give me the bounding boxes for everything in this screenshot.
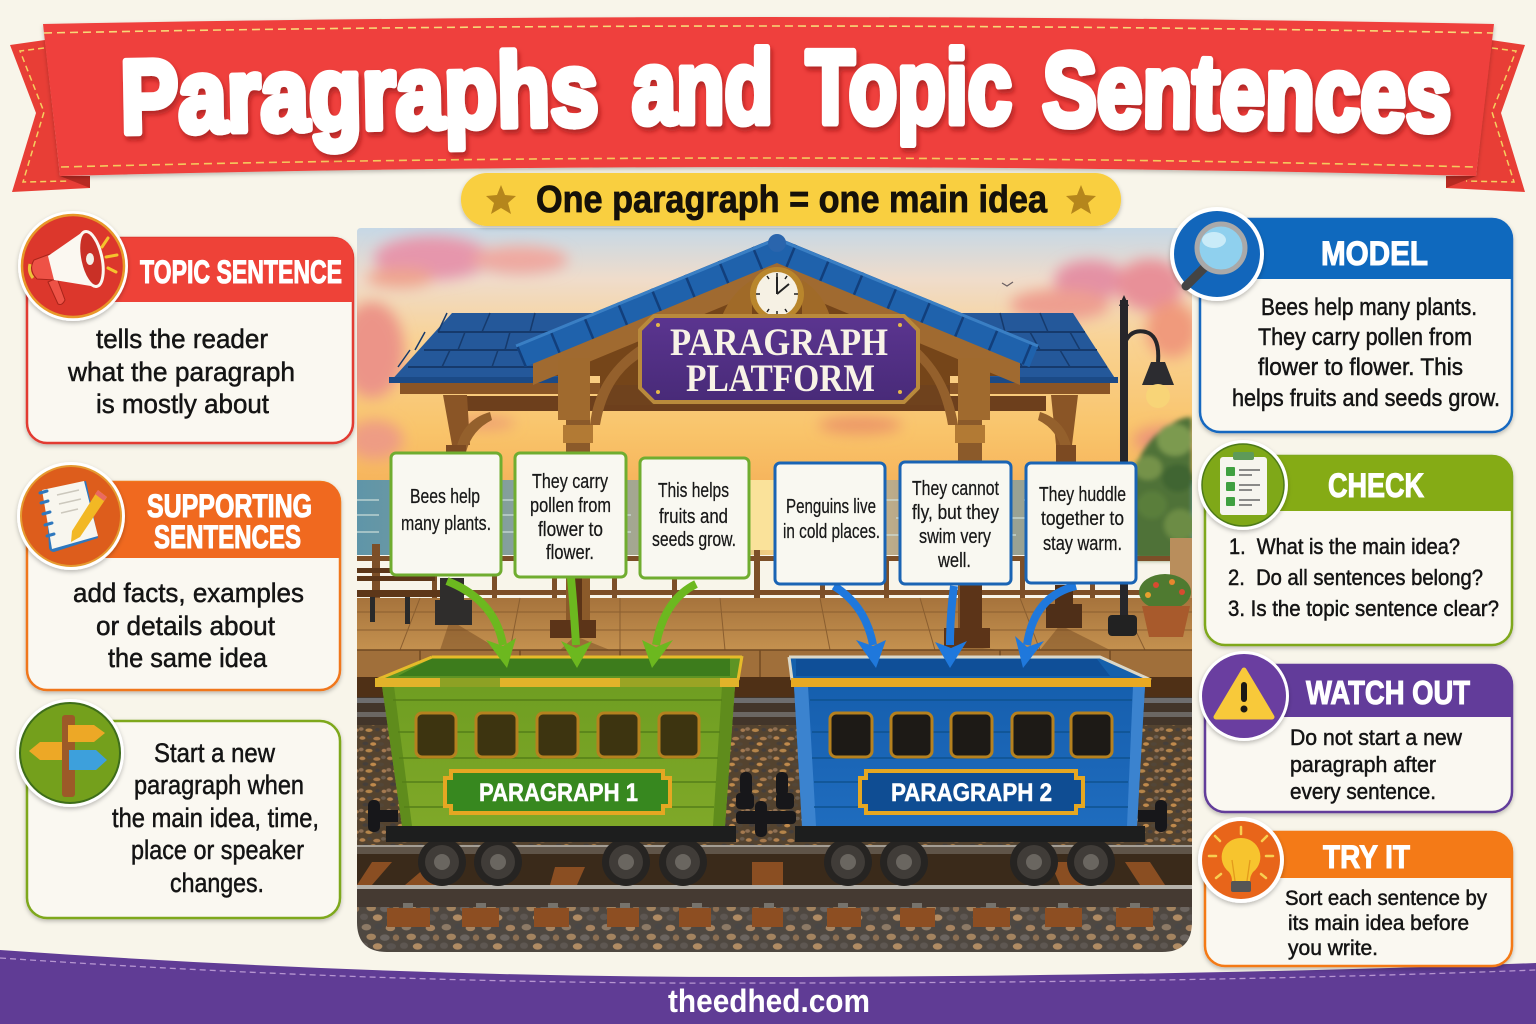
bench	[357, 568, 441, 624]
title banner	[10, 17, 1525, 192]
body text: tells the reader	[96, 324, 268, 354]
panel: check	[1198, 440, 1512, 645]
card: They carry pollen: flower.	[546, 542, 594, 564]
panel: topic sentence	[18, 211, 353, 443]
panel: supporting sentences	[17, 462, 340, 690]
side roofs	[394, 313, 592, 377]
couplers and buffers	[368, 772, 1167, 837]
ribbon body	[43, 17, 1494, 176]
railing	[357, 544, 1192, 599]
checklist text	[1228, 534, 1499, 621]
card: This helps fruits: This helps	[658, 480, 729, 502]
gable	[555, 304, 998, 385]
body text: flower to flower. This	[1258, 354, 1463, 381]
card: Bees help many plants: many plants.	[401, 513, 491, 535]
station deck	[357, 598, 1192, 697]
card: Penguins live: in cold places.	[783, 521, 880, 543]
arrows: sentences into paragraph 1	[447, 578, 696, 668]
footer website: theedhed.com	[668, 983, 870, 1019]
arrows: sentences into paragraph 2	[834, 586, 1076, 668]
heading: WATCH OUT	[1306, 674, 1470, 711]
body text: or details about	[96, 611, 275, 641]
posts	[446, 445, 466, 452]
sentence cards: paragraph 2	[775, 462, 1136, 584]
icon: warning triangle	[1199, 651, 1289, 741]
body text: every sentence.	[1290, 779, 1436, 804]
body text: you write.	[1288, 937, 1378, 960]
station sign: PARAGRAPH	[670, 321, 888, 364]
plaque	[445, 771, 670, 813]
card: This helps fruits	[640, 458, 749, 578]
station sign: PLATFORM	[686, 357, 875, 400]
gable tiles	[520, 250, 1034, 356]
body text	[67, 324, 295, 419]
body text	[1290, 725, 1462, 804]
heading: SENTENCES	[154, 519, 301, 555]
card: This helps fruits: seeds grow.	[652, 529, 736, 551]
icon: megaphone	[18, 211, 128, 321]
wheels	[418, 838, 707, 886]
body text: paragraph when	[134, 770, 304, 800]
panel: model	[1170, 207, 1512, 432]
body text: is mostly about	[96, 389, 269, 419]
plaque: PARAGRAPH 2	[891, 779, 1052, 807]
body text: changes.	[170, 868, 264, 898]
card: They cannot fly	[900, 462, 1011, 584]
trees	[1128, 417, 1196, 560]
checklist text: 3. Is the topic sentence clear?	[1228, 596, 1499, 621]
body text: its main idea before	[1288, 912, 1469, 935]
card: They huddle: stay warm.	[1043, 533, 1122, 555]
body text: add facts, examples	[73, 578, 304, 608]
heading: CHECK	[1328, 467, 1424, 505]
body text: Sort each sentence by	[1285, 887, 1487, 910]
title text: and	[632, 30, 773, 146]
body text: what the paragraph	[67, 357, 295, 387]
clock ornament	[722, 280, 830, 316]
card: Penguins live	[775, 463, 885, 584]
lamp post	[1108, 295, 1174, 636]
body text: the same idea	[108, 643, 268, 673]
panel header	[100, 482, 340, 558]
icon: signpost	[16, 699, 124, 807]
checklist text: 2. Do all sentences belong?	[1228, 565, 1483, 590]
panel header	[1250, 665, 1512, 717]
card: They carry pollen: They carry	[532, 471, 608, 493]
card: This helps fruits: fruits and	[659, 506, 728, 528]
front track	[357, 845, 1192, 927]
card: Bees help many plants: Bees help	[410, 486, 480, 508]
station sign	[640, 316, 918, 402]
icon: right star	[1066, 185, 1096, 214]
heading	[147, 488, 312, 555]
panel: try it	[1198, 817, 1512, 966]
icon: left star	[486, 185, 516, 214]
card: They cannot fly: fly, but they	[912, 502, 999, 524]
subtitle pill: One paragraph = one main idea	[536, 179, 1048, 221]
heading: SUPPORTING	[147, 488, 312, 524]
post bases	[550, 620, 596, 638]
train car: paragraph 2	[789, 656, 1151, 886]
flower pot	[1139, 574, 1191, 637]
icon: light bulb	[1198, 817, 1284, 903]
sun reflection	[750, 480, 774, 550]
rear track	[357, 697, 1192, 727]
subtitle pill	[461, 173, 1121, 226]
body text: paragraph after	[1290, 752, 1436, 777]
card: They cannot fly: well.	[937, 550, 971, 572]
clock	[750, 267, 804, 314]
train car: paragraph 1	[375, 656, 742, 886]
ballast	[357, 725, 1192, 850]
title text	[119, 30, 1452, 156]
card: Penguins live: Penguins live	[786, 496, 876, 518]
heading: MODEL	[1321, 235, 1428, 273]
icon: notebook and pencil	[17, 462, 125, 570]
card: They carry pollen: pollen from	[530, 495, 611, 517]
body text: Start a new	[154, 738, 275, 768]
icon: magnifying glass	[1170, 207, 1264, 301]
body text: Bees help many plants.	[1261, 294, 1477, 321]
body text: helps fruits and seeds grow.	[1232, 385, 1500, 412]
scene: paragraph platform and train	[340, 228, 1198, 955]
card: They huddle: They huddle	[1039, 484, 1126, 506]
card: They huddle	[1026, 463, 1136, 583]
body text: Do not start a new	[1290, 725, 1462, 750]
body text: place or speaker	[131, 835, 304, 865]
wheels	[824, 838, 1115, 886]
panel header	[1250, 456, 1512, 511]
station roof	[389, 234, 1118, 648]
checklist text: 1. What is the main idea?	[1229, 534, 1460, 559]
heading: TOPIC SENTENCE	[140, 254, 342, 290]
title text: Paragraphs	[119, 32, 599, 156]
title text: Topic	[806, 30, 1012, 146]
sky	[357, 228, 1192, 483]
panel header	[1250, 832, 1512, 878]
card: They huddle: together to	[1041, 508, 1124, 530]
footer band	[0, 950, 1536, 1024]
plaque	[860, 771, 1083, 813]
sentence cards: paragraph 1	[391, 453, 749, 578]
body text	[1232, 294, 1500, 412]
body text	[1285, 887, 1487, 960]
card: They cannot fly: They cannot	[912, 478, 999, 500]
panel: start a new paragraph	[16, 699, 340, 918]
panel header	[100, 238, 353, 302]
card: Bees help many plants	[391, 453, 501, 575]
panel: watch out	[1199, 651, 1512, 812]
icon: clipboard	[1198, 440, 1288, 530]
card: They carry pollen: flower to	[538, 519, 603, 541]
left ribbon tail	[10, 40, 90, 192]
panel header	[1250, 219, 1512, 279]
heading: TRY IT	[1323, 839, 1410, 875]
body text	[112, 738, 319, 898]
sunset clouds	[340, 236, 1198, 460]
sea	[357, 480, 1192, 555]
card: They cannot fly: swim very	[919, 526, 991, 548]
body text: They carry pollen from	[1258, 324, 1472, 351]
plaque: PARAGRAPH 1	[479, 779, 638, 807]
body text: the main idea, time,	[112, 803, 319, 833]
gull	[1002, 282, 1013, 286]
right ribbon tail	[1446, 40, 1525, 192]
roof beams and brackets	[400, 383, 1110, 394]
body text	[73, 578, 304, 673]
card: They carry pollen	[515, 453, 626, 577]
